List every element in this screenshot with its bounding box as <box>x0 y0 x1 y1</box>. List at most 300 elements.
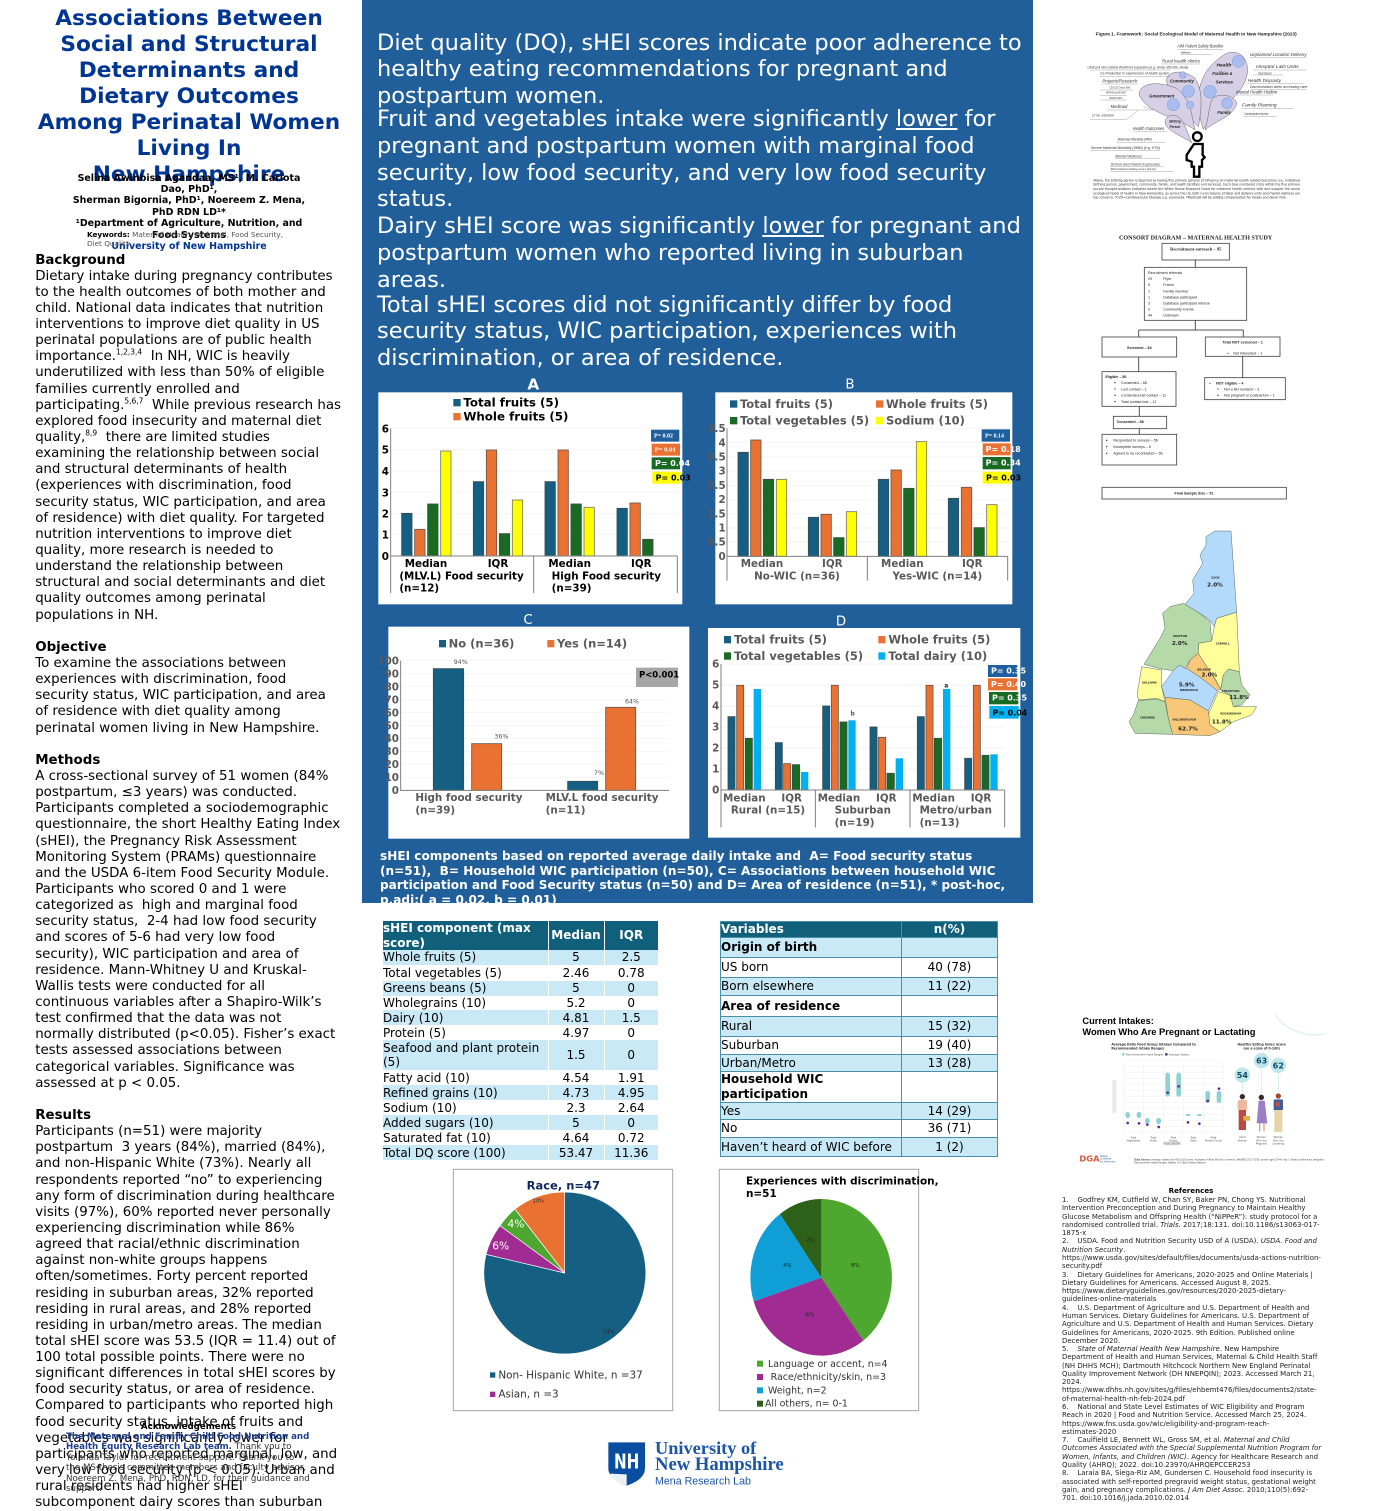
figure: consort diagram: 1 <box>1148 289 1150 293</box>
figure: social ecological model of maternal health: Facilities & <box>1212 71 1233 77</box>
chart D: area of residence: Median <box>912 792 955 804</box>
figure: current intakes: Recommended Intake Ranges <box>1111 1047 1164 1051</box>
title: Associations Between <box>55 6 323 30</box>
table: sHEI components: Whole fruits (5) <box>383 950 476 964</box>
chart A: food security: IQR <box>488 558 508 570</box>
chart B: WIC participation: 4.5 <box>707 423 726 435</box>
pie chart: experiences with discrimination: 8% <box>851 1263 860 1269</box>
figure: current intakes: Women <box>1274 1135 1283 1139</box>
pie chart: race: Race, n=47 <box>527 1178 600 1192</box>
table: sHEI components: 1.5 <box>566 1048 586 1062</box>
figure: social ecological model of maternal health: Clinical & Non-Clinical Workforce Expansion (e.g. rehab, MOUDS, doula) <box>1087 66 1188 70</box>
chart C: WIC by food security: No (n=36) <box>449 637 514 651</box>
pie chart: experiences with discrimination: 2% <box>806 1238 815 1244</box>
chart D: area of residence: 5 <box>712 680 719 692</box>
figure: consort diagram: Total contact lost – 12 <box>1121 400 1156 404</box>
figure: consort diagram: Not pregnant or postpartum – 1 <box>1224 394 1275 398</box>
figure: social ecological model of maternal health: Projects/Research <box>1102 79 1138 84</box>
chart A: food security: IQR <box>631 558 652 570</box>
table: sHEI components: IQR <box>619 928 643 942</box>
figure: social ecological model of maternal health: Rural health clinics <box>1162 58 1201 63</box>
chart A: food security: 2 <box>382 508 389 520</box>
figure: consort diagram: NOT eligible – 4 <box>1216 381 1244 385</box>
map: New Hampshire counties <box>1129 531 1257 736</box>
figure: current intakes: Protein Foods <box>1205 1139 1222 1143</box>
table: sHEI components: 4.95 <box>618 1086 645 1100</box>
pie chart: experiences with discrimination: 4% <box>783 1263 792 1269</box>
title: New Hampshire <box>93 162 285 186</box>
chart C: WIC by food security: 94% <box>454 659 468 666</box>
table: sHEI components: 2.64 <box>618 1101 645 1115</box>
chart D: area of residence: Whole fruits (5) <box>888 633 990 647</box>
map: New Hampshire counties: CARROLL <box>1216 641 1230 645</box>
chart C: WIC by food security: 90 <box>385 668 399 680</box>
petal: community <box>1167 72 1201 127</box>
figure: social ecological model of maternal health: Health Disparity <box>1248 78 1282 83</box>
petal: health facilities and services <box>1198 52 1247 129</box>
figure: social ecological model of maternal health: Family <box>1217 110 1231 116</box>
chart C: WIC by food security: Yes (n=14) <box>556 637 627 651</box>
chart C: WIC by food security: (n=39) <box>415 804 455 816</box>
figure: consort diagram: Responded to surveys – 56 <box>1113 439 1158 443</box>
pie chart: experiences with discrimination: Language or accent, n=4 <box>768 1359 888 1370</box>
chart C: WIC by food security: P<0.001 <box>639 670 679 680</box>
chart D: area of residence: Metro/urban <box>920 804 992 816</box>
pie chart: race: 10% <box>533 1199 544 1205</box>
chart D: area of residence: (n=13) <box>920 817 959 829</box>
figure: current intakes: Fruits <box>1150 1139 1157 1143</box>
chart C: WIC by food security: 30 <box>385 746 399 758</box>
chart B: WIC participation: P= 0.03 <box>986 473 1021 482</box>
table: sHEI components: 4.73 <box>563 1086 589 1100</box>
table: sHEI components: 1.91 <box>618 1071 645 1085</box>
map: New Hampshire counties: 2.0% <box>1207 583 1223 589</box>
chart C: WIC by food security: 0 <box>392 785 399 797</box>
title: Living In <box>137 136 241 160</box>
chart B: WIC participation: Median <box>881 558 924 570</box>
map: New Hampshire counties: CHESHIRE <box>1140 716 1155 720</box>
figure: consort diagram: Database participant <box>1163 295 1197 299</box>
figure: current intakes: 63 <box>1256 1057 1267 1066</box>
chart A: food security: (n=12) <box>399 583 439 595</box>
map: New Hampshire counties: SULLIVAN <box>1142 680 1157 684</box>
chart C: WIC by food security: 70 <box>385 694 399 706</box>
figure: social ecological model of maternal health: Hospital L&D Units <box>1256 64 1300 69</box>
chart A: food security: 0 <box>382 551 389 563</box>
table: participant variables: 14 (29) <box>928 1104 971 1118</box>
figure: social ecological model of maternal health: Wellness <box>1181 50 1191 54</box>
chart D: area of residence: 3 <box>712 722 719 734</box>
table: participant variables: Household WIC participation <box>721 1072 823 1101</box>
icon: lactating woman <box>1274 1093 1283 1132</box>
chart A: food security: 6 <box>382 423 389 435</box>
title: Among Perinatal Women <box>38 110 340 134</box>
chart A: food security: 5 <box>382 445 389 457</box>
figure: consort diagram: 3 <box>1148 301 1150 305</box>
chart A: food security: 3 <box>382 487 389 499</box>
logo: University of New Hampshire: Mena Research Lab <box>655 1475 751 1487</box>
chart A: food security: P= 0.01 <box>655 447 676 454</box>
chart C: WIC by food security: MLV.L food security <box>546 792 659 804</box>
table: sHEI components: Protein (5) <box>383 1026 446 1040</box>
chart D: area of residence: 2 <box>712 743 719 755</box>
chart A: food security: P= 0.03 <box>656 473 691 482</box>
chart D: area of residence: b <box>851 711 856 718</box>
table: participant variables: 36 (71) <box>928 1121 971 1135</box>
figure: consort diagram: Recruitment outreach – 85 <box>1170 247 1222 252</box>
table: sHEI components: Total DQ score (100) <box>383 1146 506 1160</box>
figure: social ecological model of maternal health <box>1087 32 1307 200</box>
pie chart: race: Non- Hispanic White, n =37 <box>498 1369 643 1381</box>
table: sHEI components: 4.54 <box>563 1071 589 1085</box>
chart A: food security: (n=39) <box>552 583 591 595</box>
figure: consort diagram: 2 <box>1148 308 1150 312</box>
figure: current intakes: 54 <box>1237 1071 1248 1080</box>
chart A: food security: P= 0.04 <box>655 459 690 468</box>
chart B: WIC participation: 4 <box>718 437 726 449</box>
map: New Hampshire counties: 62.7% <box>1178 727 1198 733</box>
map: New Hampshire counties: GRAFTON <box>1173 634 1187 638</box>
chart C: WIC by food security: 7% <box>594 770 604 777</box>
figure: consort diagram: Incomplete surveys – 5 <box>1113 445 1151 449</box>
table: sHEI components: 2.5 <box>622 950 641 964</box>
table: participant variables: Origin of birth <box>721 940 817 954</box>
icon: DGA logo: DGA <box>1079 1153 1100 1163</box>
chart C: WIC by food security: 60 <box>385 707 399 719</box>
figure: social ecological model of maternal health: Family Planning <box>1242 103 1277 108</box>
figure: social ecological model of maternal health: Person <box>1170 125 1181 129</box>
table: participant variables: Suburban <box>721 1038 779 1052</box>
chart C: WIC by food security: 100 <box>377 655 399 667</box>
figure: current intakes: Total <box>1150 1136 1157 1140</box>
chart C: WIC by food security: High food security <box>415 792 523 804</box>
icon: pregnant woman <box>1257 1095 1267 1131</box>
chart D: area of residence: Total dairy (10) <box>888 649 987 663</box>
icon: adult woman <box>1238 1094 1250 1130</box>
pie chart: experiences with discrimination: Weight, n=2 <box>768 1385 827 1396</box>
figure: current intakes: Women <box>1238 1138 1247 1142</box>
figure: consort diagram: Total NOT screened – 1 <box>1222 341 1263 345</box>
chart B: WIC participation: 3.5 <box>707 452 726 464</box>
figure: consort diagram: Flyer <box>1163 277 1172 281</box>
chart C: WIC by food security: C <box>523 613 533 628</box>
figure: current intakes: Data Source: Average intakes and HEI-2015 scores: Analyses of What We Eat in America, NHANES 2017-2018, women ages 20-44, day 1 dietary intake data, weighted. <box>1134 1159 1325 1162</box>
figure: consort diagram: Consented lost contact – 11 <box>1121 394 1166 398</box>
title: Determinants and <box>79 58 299 82</box>
figure: social ecological model of maternal health: Services <box>1216 79 1233 85</box>
logo: University of New Hampshire: University of <box>655 1438 757 1458</box>
table: participant variables: Rural <box>721 1019 752 1033</box>
chart D: area of residence: Median <box>818 792 860 804</box>
pie chart: experiences with discrimination <box>719 1169 939 1411</box>
chart C: WIC by food security: 40 <box>385 733 399 745</box>
pie chart: experiences with discrimination: All others, n= 0-1 <box>765 1399 848 1410</box>
figure: social ecological model of maternal health: Co-Production in experiences of health system <box>1100 72 1169 76</box>
figure: current intakes: Women Who Are Pregnant or Lactating <box>1082 1027 1256 1037</box>
chart B: WIC participation <box>707 377 1021 604</box>
figure: social ecological model of maternal health: AIM Patient Safety Bundles <box>1176 43 1224 48</box>
chart B: WIC participation: P= 0.34 <box>986 459 1021 468</box>
chart B: WIC participation: Yes-WIC (n=14) <box>891 570 982 582</box>
table: participant variables: n(%) <box>934 922 965 936</box>
title <box>38 6 340 186</box>
pie chart: race: 74% <box>603 1330 615 1336</box>
figure: current intakes: Recommended Intake Ranges: Healthy U.S.-Style Dietary Patterns <box>1134 1162 1207 1165</box>
references: 1. Godfrey KM, Cutfield W, Chan SY, Baker PN, Chong YS. Nutritional Intervention Preconception and During Pregnancy to Maintain Healthy Glucose Metabolism and Offspring Health (“NiPPeR”): study protocol for a randomised controlled trial. Trials. 2017;18:131. doi:10.1186/s13063-017- 1875-x 2. USDA. Food and Nutrition Security USD of A (USDA). USDA. Food and Nutrition Security. https://www.usda.gov/sites/default/files/documents/usda-actions-nutrition- security.pdf 3. Dietary Guidelines for Americans, 2020-2025 and Online Materials | Dietary Guidelines for Americans. Accessed August 8, 2025. https://www.dietaryguidelines.gov/resources/2020-2025-dietary- guidelines-online-materials 4. U.S. Department of Agriculture and U.S. Department of Health and Human Services. Dietary Guidelines for Americans. U.S. Department of Agriculture and U.S. Department of Health and Human Services. Dietary Guidelines for Americans, 2020-2025. 9th Edition. Published online December 2020. 5. State of Maternal Health New Hampshire. New Hampshire Department of Health and Human Services, Maternal & Child Health Staff (NH DHHS MCH); Dartmouth Hitchcock Northern New England Perinatal Quality Improvement Network (DH NNEPQIN); 2023. Accessed March 21, 2024. https://www.dhhs.nh.gov/sites/g/files/ehbemt476/files/documents2/state- of-maternal-health-nh-feb-2024.pdf 6. National and State Level Estimates of WIC Eligibility and Program Reach in 2020 | Food and Nutrition Service. Accessed March 25, 2024. https://www.fns.usda.gov/wic/eligibility-and-program-reach- estimates-2020 7. Caulfield LE, Bennett WL, Gross SM, et al. Maternal and Child Outcomes Associated with the Special Supplemental Nutrition Program for Women, Infants, and Children (WIC). Agency for Healthcare Research and Quality (AHRQ); 2022. doi:10.23970/AHRQEPCCER253 8. Laraia BA, Siega-Riz AM, Gundersen C. Household food insecurity is associated with self-reported pregravid weight status, gestational weight gain, and pregnancy complications. J Am Diet Assoc. 2010;110(5):692- 701. doi:10.1016/j.jada.2010.02.014 <box>1062 1196 1321 1502</box>
chart D: area of residence: 4 <box>712 701 719 713</box>
chart D: area of residence: Suburban <box>835 804 891 816</box>
table: sHEI components: Saturated fat (10) <box>383 1131 491 1145</box>
chart B: WIC participation: P= 0.18 <box>986 445 1021 454</box>
acknowledgements: The Maternal and Family Child Food Nutrition and Health Equity Research Lab team. Thank you to Yolanda Taylor for recruitment support. Thank you to the MS thesis committee members and faculty advisor, Noereem Z. Mena, PhD, RDN, LD, for their guidance and support. <box>66 1432 310 1494</box>
map: New Hampshire counties: BELKNAP <box>1197 667 1211 671</box>
chart C: WIC by food security: 64% <box>625 698 639 705</box>
chart B: WIC participation: Sodium (10) <box>886 414 965 428</box>
figure: consort diagram: Screened – 84 <box>1127 346 1153 350</box>
figure: consort diagram: 5 <box>1148 283 1150 287</box>
figure: social ecological model of maternal health: MMCRISH and RR DHHC <box>1106 90 1126 94</box>
pie chart: race: 4% <box>508 1218 524 1231</box>
map: New Hampshire counties: HILLSBOROUGH <box>1173 717 1196 721</box>
references: References <box>1169 1186 1213 1195</box>
figure: social ecological model of maternal health: Community <box>1170 79 1194 85</box>
caption for charts A to D: sHEI components based on reported average daily intake and A= Food security status (n=51), B= Household WIC participation (n=50), C= Associations between household WIC participation and Food Security status (n=50) and D= Area of residence (n=51), * post-hoc, p.adj:( a = 0.02, b = 0.01) <box>380 849 1005 907</box>
figure: current intakes <box>1079 1013 1327 1165</box>
figure: consort diagram: Not Interested – 1 <box>1233 351 1262 355</box>
figure: current intakes: Adult <box>1239 1135 1246 1139</box>
table: participant variables <box>720 921 998 1157</box>
table: sHEI components: 4.97 <box>563 1026 589 1040</box>
figure: social ecological model of maternal health: MAMA CDCC <box>1109 96 1123 100</box>
chart D: area of residence: Median <box>723 792 766 804</box>
figure: consort diagram: Not a NH resident – 3 <box>1224 387 1259 391</box>
chart B: WIC participation: No-WIC (n=36) <box>754 570 840 582</box>
table: sHEI components: 0 <box>627 1116 635 1130</box>
chart A: food security: (MLV.L) Food security <box>399 570 524 582</box>
figure: current intakes: Total <box>1210 1136 1217 1140</box>
pie chart: experiences with discrimination: Race/ethnicity/skin, n=3 <box>771 1372 886 1383</box>
figure: current intakes: Who Are <box>1256 1138 1267 1142</box>
table: sHEI components: Total vegetables (5) <box>383 966 502 980</box>
table: sHEI components: 0 <box>627 981 635 995</box>
key findings text: total sHEI: Total sHEI scores did not significantly differ by food security status, WIC participation, experiences with discrimination, or area of residence. <box>377 292 957 371</box>
figure: social ecological model of maternal health: Above, the birthing person is depicted as having five primary spheres of influence on maternal health related outcomes (i.e., individual <box>1093 178 1300 182</box>
figure: social ecological model of maternal health: Health Outcomes <box>1133 126 1165 131</box>
table: sHEI components: 2.3 <box>566 1101 586 1115</box>
chart C: WIC by food security: 20 <box>385 759 399 771</box>
figure: social ecological model of maternal health: Figure 1. Framework: Social Ecological Model of Maternal Health in New Hampshire (2023) <box>1096 32 1297 37</box>
key findings text: dairy: Dairy sHEI score was significantly lower for pregnant and postpartum women who reported living in suburban areas. <box>377 213 1021 293</box>
figure: consort diagram: ➢ <box>1227 351 1231 355</box>
chart C: WIC by food security: 80 <box>385 681 399 693</box>
logo: University of New Hampshire: NH <box>614 1449 639 1473</box>
figure: consort diagram: 29 <box>1148 277 1152 281</box>
chart D: area of residence: 1 <box>712 764 719 776</box>
figure: current intakes: Total <box>1170 1136 1177 1140</box>
chart A: food security: 1 <box>382 530 389 542</box>
figure: social ecological model of maternal health: Contraceptive Access <box>1244 112 1269 116</box>
chart C: WIC by food security: 36% <box>494 733 508 740</box>
figure: consort diagram <box>1102 236 1286 499</box>
table: sHEI components: 5 <box>572 981 580 995</box>
table: sHEI components: 0 <box>627 996 635 1010</box>
chart D: area of residence <box>708 614 1028 838</box>
chart A: food security: Median <box>548 558 591 570</box>
logo: University of New Hampshire: New Hampshire <box>655 1454 784 1475</box>
chart A: food security: Whole fruits (5) <box>463 409 568 423</box>
chart C: WIC by food security: 10 <box>385 772 399 784</box>
map: New Hampshire counties: 11.8% <box>1229 695 1249 701</box>
figure: social ecological model of maternal health: Maternal Mortality (MM) <box>1118 138 1152 142</box>
figure: consort diagram: Unknown <box>1163 314 1179 318</box>
figure: current intakes: Vegetables <box>1126 1139 1141 1143</box>
table: participant variables: Area of residence <box>721 998 840 1012</box>
figure: social ecological model of maternal health: ecological model of health. In New Hampshire, as across the US, both rural closures of labor and delivery units and mental wellness are <box>1093 191 1300 195</box>
pie chart: race: Asian, n =3 <box>498 1389 559 1401</box>
chart B: WIC participation: IQR <box>962 558 983 570</box>
table: participant variables: 11 (22) <box>928 979 971 993</box>
figure: social ecological model of maternal health: Birthing <box>1169 120 1181 124</box>
figure: social ecological model of maternal health: purple thought bubbles indicates where the White House Blueprint Goals for maternal health interact with and support the social <box>1093 187 1300 191</box>
figure: consort diagram: Lost contact – 1 <box>1121 387 1147 391</box>
chart B: WIC participation: 0 <box>718 551 726 563</box>
figure: consort diagram: Database participant referral <box>1163 301 1210 305</box>
table: sHEI components: 5 <box>572 950 580 964</box>
table: sHEI components: Dairy (10) <box>383 1011 443 1025</box>
chart D: area of residence: Rural (n=15) <box>731 804 805 816</box>
table: sHEI components: 4.81 <box>563 1011 589 1025</box>
chart D: area of residence: Total fruits (5) <box>734 633 827 647</box>
figure: consort diagram: Friend <box>1163 283 1174 287</box>
chart B: WIC participation: Whole fruits (5) <box>886 397 988 411</box>
keywords: Keywords: Maternal Health, Perinatal, Food Security, Diet Quality <box>87 230 283 248</box>
figure: social ecological model of maternal health: 12 mo. extension <box>1092 114 1114 118</box>
table: sHEI components: 11.36 <box>614 1146 648 1160</box>
petal: family <box>1205 95 1237 130</box>
figure: social ecological model of maternal health: Government <box>1149 93 1174 99</box>
figure: current intakes: Average Daily Food Group Intakes Compared to <box>1111 1043 1197 1047</box>
chart A: food security: Median <box>405 558 447 570</box>
icon: DGA logo: Dietary <box>1100 1155 1109 1158</box>
chart B: WIC participation: Median <box>741 558 783 570</box>
pie chart: experiences with discrimination: n=51 <box>746 1188 777 1200</box>
figure: social ecological model of maternal health: top concerns. *CVD=Cardiovascular Disease e.g. eclampsia. *Medicaid will be adding compensation for doulas and donor milk. <box>1093 196 1287 200</box>
figure: social ecological model of maternal health: SDS (pre/tween-leading screen, bad etc) <box>1111 168 1156 171</box>
chart B: WIC participation: 3 <box>718 466 726 478</box>
table: sHEI components: 1.5 <box>622 1011 641 1025</box>
figure: consort diagram: 1 <box>1148 295 1150 299</box>
figure: consort diagram: Consented – 68 <box>1117 420 1144 424</box>
table: participant variables: Haven’t heard of WIC before <box>721 1140 892 1154</box>
figure: current intakes: Total <box>1130 1136 1137 1140</box>
chart D: area of residence: P= 0.35 <box>992 694 1027 703</box>
figure: current intakes: Pregnant <box>1256 1142 1267 1146</box>
figure: current intakes: Who Are <box>1273 1138 1284 1142</box>
figure: consort diagram: Consented – 68 <box>1121 381 1147 385</box>
table: participant variables: Urban/Metro <box>721 1056 796 1070</box>
chart A: food security: Total fruits (5) <box>463 395 559 409</box>
figure: social ecological model of maternal health: Health <box>1216 63 1231 69</box>
chart B: WIC participation: IQR <box>822 558 843 570</box>
chart D: area of residence: Total vegetables (5) <box>734 649 863 663</box>
table: sHEI components: Wholegrains (10) <box>383 996 486 1010</box>
figure: current intakes: Healthy Eating Index Score <box>1237 1043 1286 1047</box>
table: participant variables: 40 (78) <box>928 960 971 974</box>
chart C: WIC by food security: 50 <box>385 720 399 732</box>
figure: current intakes: Total <box>1190 1136 1197 1140</box>
figure: current intakes: Dairy <box>1190 1139 1197 1143</box>
map: New Hampshire counties: 5.9% <box>1179 682 1195 688</box>
table: participant variables: 19 (40) <box>928 1038 971 1052</box>
chart B: WIC participation: 0.5 <box>707 537 726 549</box>
table: participant variables: 15 (32) <box>928 1019 971 1033</box>
petal: birthing person <box>1165 115 1192 143</box>
chart A: food security <box>378 376 691 604</box>
figure: social ecological model of maternal health: birthing person, government, community, family, and health facilities and services). Each blue numbered circle within the five primary <box>1093 183 1300 187</box>
chart D: area of residence: P= 0.35 <box>991 666 1026 675</box>
figure: current intakes: Lactating <box>1273 1142 1285 1146</box>
figure: social ecological model of maternal health: Unplanned Location Delivery <box>1250 52 1307 57</box>
figure: current intakes: Recommended Intake Ranges <box>1126 1052 1164 1056</box>
table: participant variables: Yes <box>721 1104 740 1118</box>
figure: current intakes: Women <box>1257 1135 1266 1139</box>
chart A: food security: High Food security <box>552 570 661 582</box>
table: sHEI components: 0.72 <box>618 1131 645 1145</box>
pie chart: experiences with discrimination: 6% <box>806 1313 814 1319</box>
figure: current intakes: (on a scale of 0-100) <box>1243 1047 1280 1051</box>
chart B: WIC participation: Total vegetables (5) <box>740 414 869 428</box>
table: participant variables: Born elsewhere <box>721 979 814 993</box>
chart A: food security: 4 <box>382 466 389 478</box>
chart D: area of residence: (n=19) <box>835 817 874 829</box>
table: sHEI components: sHEI component (max score) <box>383 921 531 950</box>
pie chart: race <box>453 1169 673 1411</box>
figure: social ecological model of maternal health: Severe Maternal Morbidity (SMM) (e.g. HTN) <box>1091 146 1160 150</box>
figure: consort diagram: Family member <box>1163 289 1189 293</box>
chart D: area of residence: 0 <box>712 785 719 797</box>
petal: government <box>1139 84 1195 130</box>
chart C: WIC by food security <box>377 613 689 839</box>
chart B: WIC participation: B <box>845 377 855 392</box>
table: sHEI components: Median <box>551 928 601 942</box>
table: participant variables: US born <box>721 960 769 974</box>
chart C: WIC by food security: (n=11) <box>546 804 585 816</box>
map: New Hampshire counties: COOS <box>1211 576 1220 580</box>
chart B: WIC participation: Total fruits (5) <box>740 397 833 411</box>
chart B: WIC participation: 2.5 <box>707 480 726 492</box>
figure: consort diagram: Recruitment referrals <box>1148 271 1182 275</box>
table: participant variables: 1 (2) <box>935 1140 964 1154</box>
chart D: area of residence: a <box>944 682 948 689</box>
table: participant variables: 13 (28) <box>928 1056 971 1070</box>
logo: University of New Hampshire <box>608 1438 784 1487</box>
figure: current intakes: 62 <box>1273 1061 1284 1070</box>
table: sHEI components: Fatty acid (10) <box>383 1071 470 1085</box>
title: Social and Structural <box>60 32 318 56</box>
figure: current intakes: Average Intakes <box>1169 1052 1190 1056</box>
chart B: WIC participation: 1.5 <box>707 508 726 520</box>
figure: social ecological model of maternal health: CDCCE Grant, AIM <box>1109 85 1131 89</box>
icon: pregnant person <box>1187 132 1205 177</box>
pie chart: experiences with discrimination: Experiences with discrimination, <box>746 1175 939 1187</box>
figure: consort diagram: Final Sample Size – 51 <box>1174 491 1214 495</box>
figure: consort diagram: Community events <box>1163 308 1194 312</box>
map: New Hampshire counties: 11.8% <box>1212 719 1232 725</box>
chart D: area of residence: IQR <box>971 792 991 804</box>
table: sHEI components: Sodium (10) <box>383 1101 457 1115</box>
table: participant variables: No <box>721 1121 737 1135</box>
chart A: food security: A <box>527 376 539 394</box>
